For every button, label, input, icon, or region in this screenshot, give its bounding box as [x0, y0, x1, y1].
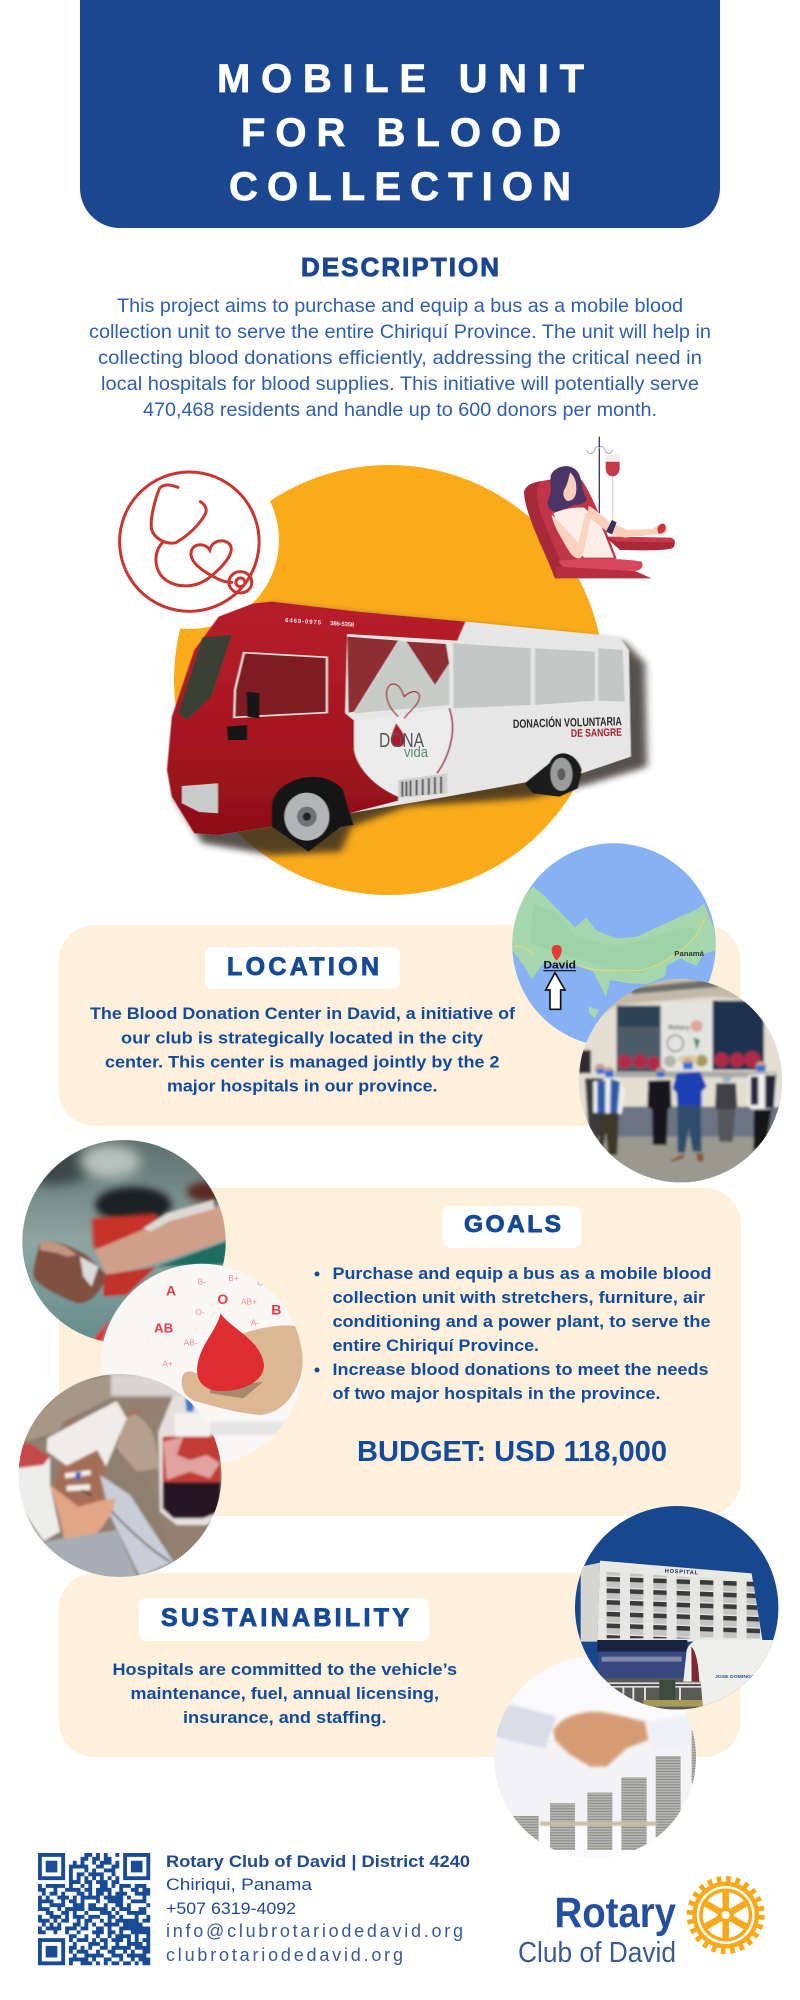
- chair: [524, 479, 675, 578]
- photo: arm donating: [13, 1138, 230, 1348]
- panel: location: [58, 925, 740, 1126]
- photo: blood types and drop: O-: [195, 1307, 205, 1317]
- iv tape: [65, 1470, 91, 1491]
- description paragraph: collecting blood donations efficiently, addressing the critical need in: [98, 348, 702, 369]
- iv pole and bag: [587, 437, 620, 521]
- blood type letters: O: [217, 1291, 228, 1307]
- bus shadow: [174, 605, 647, 855]
- location text: The Blood Donation Center in David, a initiative of: [90, 1005, 516, 1023]
- description paragraph: local hospitals for blood supplies. This initiative will potentially serve: [101, 374, 699, 395]
- bus body white: [167, 602, 631, 835]
- map pin: [552, 945, 562, 961]
- rotary logo: [518, 1880, 761, 1969]
- windshield: [178, 635, 232, 720]
- photo: blood types and drop: A-: [251, 1318, 259, 1328]
- photo: blood types and drop: B+: [228, 1273, 239, 1283]
- goals bullet list: collection unit with stretchers, furniture, air: [332, 1289, 706, 1307]
- woman: [548, 466, 667, 558]
- photo: handshake and coin stacks: [492, 1655, 698, 1862]
- glove: [47, 1401, 127, 1467]
- coin stacks: [513, 1730, 696, 1850]
- sustainability heading pill: [139, 1598, 429, 1641]
- photo: hospital building: JOSE DOMINGO: [715, 1674, 755, 1679]
- rotary logo: Club of David: [518, 1937, 676, 1969]
- title text: COLLECTION: [229, 165, 571, 209]
- icon: rotary gear: [690, 1880, 761, 1950]
- sustainability text: [112, 1661, 457, 1727]
- goals bullet list: Increase blood donations to meet the needs: [332, 1361, 708, 1379]
- rubber drop: [197, 1313, 264, 1391]
- sustainability text: insurance, and staffing.: [183, 1709, 386, 1727]
- footer: QR code: [38, 1855, 150, 1963]
- description paragraph: This project aims to purchase and equip a bus as a mobile blood: [117, 296, 683, 317]
- goals heading pill: GOALS: [464, 1211, 561, 1238]
- footer: contact details: clubrotariodedavid.org: [166, 1945, 403, 1965]
- photo: hospital building: HOSPITAL: [665, 1569, 699, 1576]
- vent: [398, 773, 447, 798]
- location text: our club is strategically located in the city: [121, 1030, 484, 1048]
- rear windows: [453, 643, 625, 708]
- blood type letters: B: [271, 1302, 281, 1318]
- title text: FOR BLOOD: [241, 111, 561, 155]
- goals bullet list: conditioning and a power plant, to serve the: [332, 1313, 710, 1331]
- footer: contact details: Rotary Club of David | District 4240: [166, 1853, 470, 1871]
- rear wheel: [525, 753, 582, 797]
- location text: major hospitals in our province.: [167, 1078, 438, 1096]
- blood type letters: A: [166, 1283, 176, 1299]
- window flowers: [618, 1051, 760, 1070]
- rotary wordmark: Rotary: [554, 1889, 676, 1937]
- sustainability text: maintenance, fuel, annual licensing,: [130, 1685, 439, 1703]
- goals heading pill: [442, 1206, 581, 1248]
- icon: stethoscope with heart: [101, 451, 279, 629]
- photo: blood types and drop: C: [257, 1278, 263, 1288]
- goals bullet list: [314, 1265, 712, 1403]
- hand: [50, 1485, 115, 1546]
- footer: contact details: +507 6319-4092: [166, 1899, 296, 1918]
- orange circle behind bus: [174, 465, 604, 895]
- blood type letters: [154, 1286, 281, 1332]
- photo: blood types and drop: B-: [198, 1276, 206, 1286]
- description paragraph: [89, 296, 711, 421]
- goals bullet list: of two major hospitals in the province.: [332, 1385, 660, 1403]
- bus lettering: DONACIÓN VOLUNTARIA: [513, 713, 622, 731]
- footer: contact details: [166, 1853, 470, 1965]
- description heading: DESCRIPTION: [301, 252, 499, 282]
- headlight: [182, 783, 218, 813]
- photo: blood types and drop: A+: [162, 1359, 173, 1369]
- title text: MOBILE UNIT: [217, 57, 584, 101]
- bus lettering: 6469-0975: [285, 618, 322, 627]
- panel: sustainability: [58, 1573, 740, 1757]
- blanket: [43, 1530, 138, 1578]
- photo: hospital building: [573, 1505, 780, 1712]
- footer: contact details: Chiriqui, Panama: [166, 1875, 313, 1894]
- photo: club members at the center: Rotary: [668, 1024, 690, 1031]
- footer: contact details: info@clubrotariodedavid.org: [166, 1921, 463, 1941]
- location heading pill: [205, 947, 400, 989]
- sustainability text: Hospitals are committed to the vehicle’s: [112, 1661, 457, 1679]
- bus logo drop and heart: [387, 684, 419, 718]
- description section: [89, 252, 711, 421]
- photo: map of Panama: [510, 842, 720, 1048]
- photo: blood types and drop: AB+: [241, 1296, 257, 1306]
- drop window panels: [347, 637, 398, 713]
- bus lettering: 386-5358: [330, 621, 355, 629]
- bus photo: [167, 602, 647, 855]
- location heading pill: LOCATION: [227, 953, 379, 981]
- patient shirt: [17, 1457, 60, 1541]
- bus lettering: DONA: [379, 730, 425, 752]
- photo: blood types and drop: [100, 1263, 303, 1467]
- location text: center. This center is managed jointly by the 2: [105, 1054, 500, 1072]
- title text: [217, 57, 584, 209]
- blood type letters: AB: [154, 1320, 174, 1335]
- photo: club members at the center: [577, 977, 783, 1185]
- mirrors: [227, 692, 260, 740]
- illustration: woman donating blood: [524, 437, 675, 578]
- sustainability heading pill: SUSTAINABILITY: [161, 1604, 409, 1632]
- photo: blood bag and arm: [17, 1373, 223, 1578]
- photo: map of Panama: Panamá: [674, 951, 704, 958]
- budget figure: BUDGET: USD 118,000: [357, 1436, 667, 1468]
- white drop shape: [354, 708, 453, 797]
- bus lettering: [285, 618, 622, 761]
- door window: [234, 653, 327, 717]
- bus red front: [167, 602, 466, 835]
- title banner: [80, 0, 720, 228]
- bus lettering: vida: [404, 744, 429, 761]
- members: [585, 1055, 777, 1162]
- location text: [90, 1005, 516, 1096]
- hand: [182, 1325, 303, 1415]
- goals bullet list: Purchase and equip a bus as a mobile blood: [332, 1265, 712, 1283]
- photo: blood types and drop: AB-: [184, 1338, 198, 1348]
- arrow pointing to David: [546, 973, 565, 1009]
- goals bullet list: entire Chiriquí Province.: [332, 1337, 539, 1355]
- panel: goals: [59, 1188, 741, 1516]
- description paragraph: 470,468 residents and handle up to 600 donors per month.: [143, 400, 657, 421]
- bus lettering: DE SANGRE: [571, 727, 622, 740]
- photo: map of Panama: David: [543, 959, 576, 971]
- front wheel: [272, 777, 353, 852]
- description paragraph: collection unit to serve the entire Chiriquí Province. The unit will help in: [89, 322, 711, 343]
- blood bag: [158, 1395, 220, 1525]
